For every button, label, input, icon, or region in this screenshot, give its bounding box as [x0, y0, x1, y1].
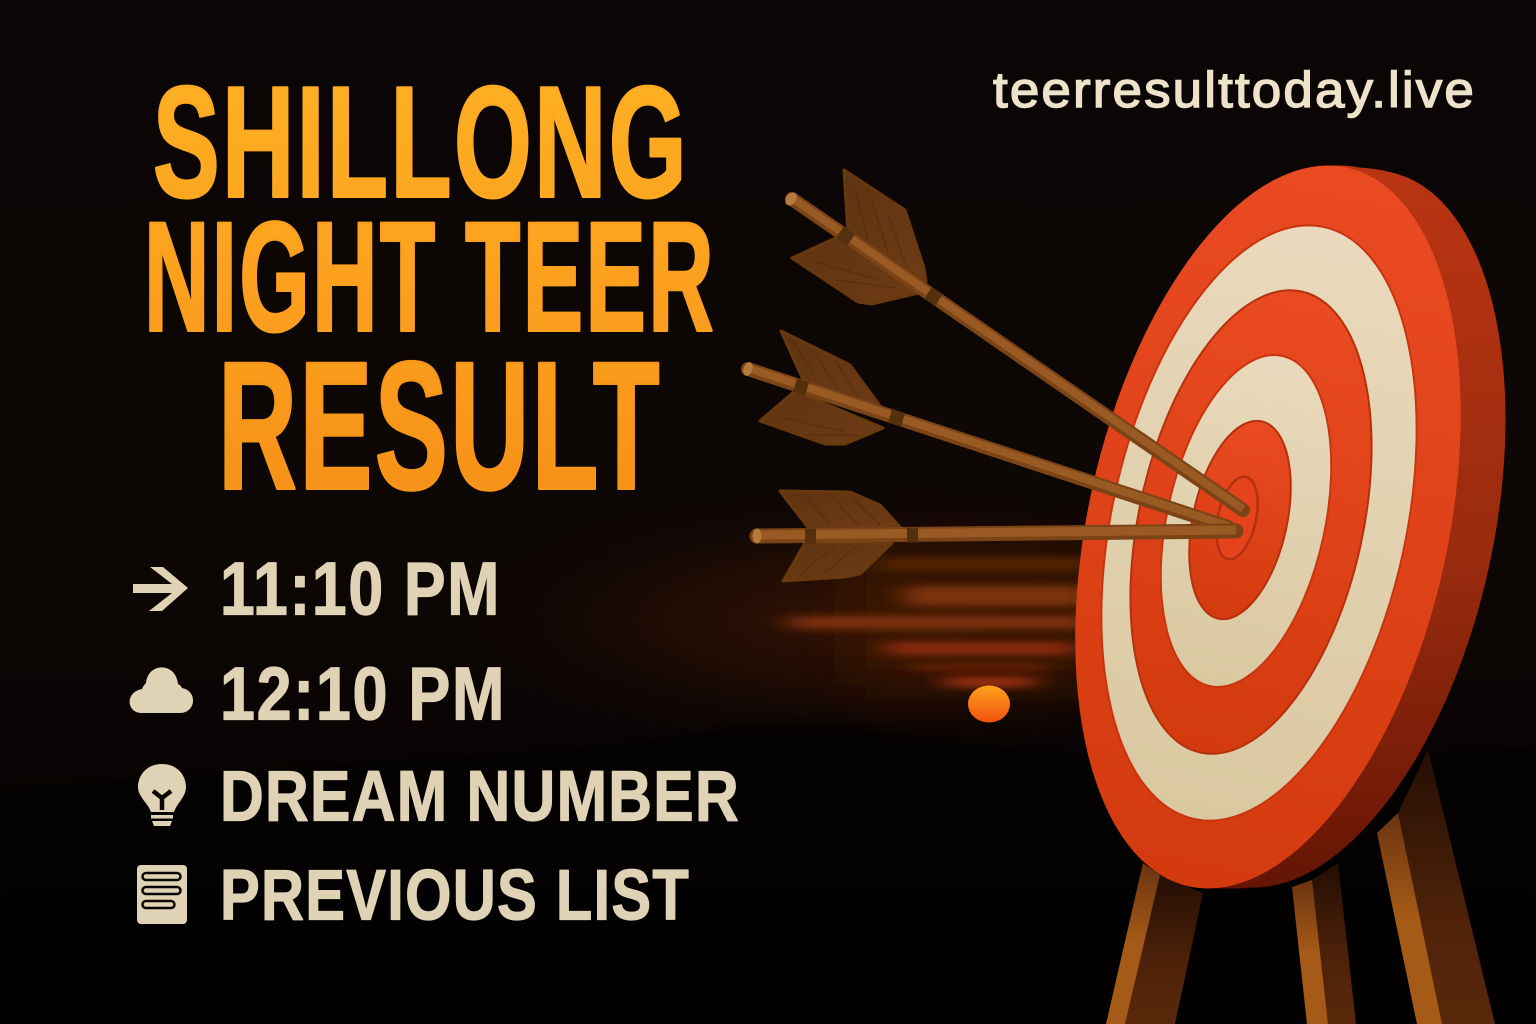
title: NIGHT TEER: [144, 190, 716, 364]
dream number label: DREAM NUMBER: [220, 758, 740, 836]
inner red ring: [1172, 411, 1308, 629]
bullseye: [1209, 473, 1265, 563]
list: times and links: [130, 546, 740, 936]
title: RESULT: [218, 324, 662, 528]
icon: arrow: [133, 567, 188, 611]
outer red ring: [1013, 129, 1523, 925]
inner cream ring: [1133, 339, 1359, 703]
arrow one: [783, 170, 1243, 510]
icon: cloud: [130, 667, 193, 713]
target stand legs: [1106, 750, 1495, 1024]
icon: document list: [137, 865, 187, 924]
previous list label: PREVIOUS LIST: [220, 856, 690, 936]
website url: teerresulttoday.live: [993, 62, 1476, 118]
target board: [1013, 129, 1536, 925]
arrow three: [752, 491, 1236, 581]
arrow two: [742, 331, 1228, 527]
sunset clouds: [790, 550, 1110, 687]
title: [144, 54, 716, 528]
title: SHILLONG: [153, 54, 689, 230]
icon: light bulb: [138, 764, 186, 826]
red ring: [1091, 267, 1411, 777]
cream ring: [1050, 196, 1468, 850]
second time: 12:10 PM: [220, 652, 506, 736]
sun: [968, 686, 1010, 722]
board rim: [1019, 129, 1536, 925]
first time: 11:10 PM: [220, 546, 501, 630]
